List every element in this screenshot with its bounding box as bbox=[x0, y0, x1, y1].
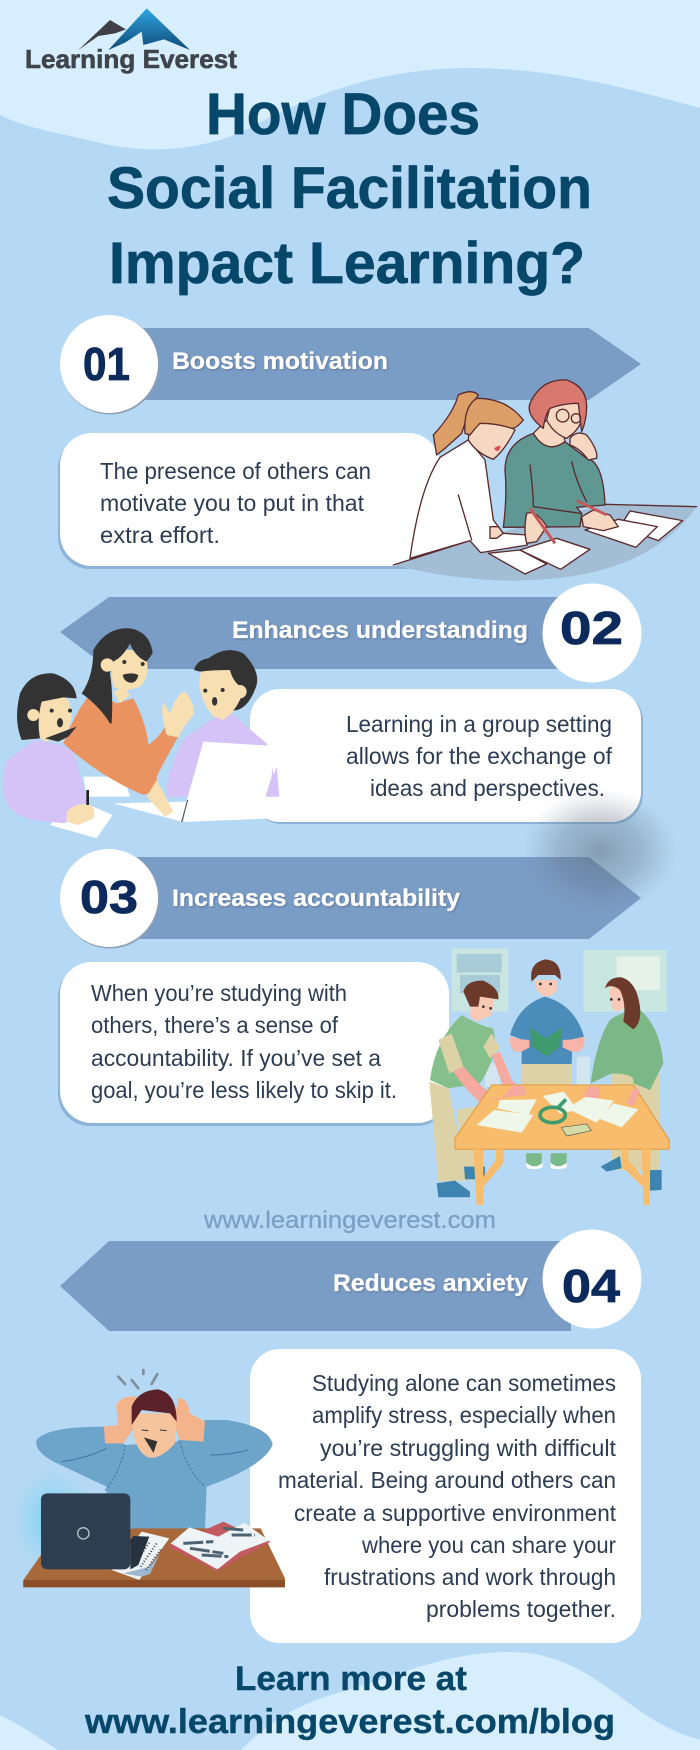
banner 01: Boosts motivation bbox=[172, 348, 388, 375]
circle 02 bbox=[542, 584, 642, 682]
card 03: When you’re studying with bbox=[91, 980, 347, 1006]
title bbox=[107, 82, 592, 296]
card 02 bbox=[250, 689, 643, 824]
footer call to action: Learn more at bbox=[235, 1660, 467, 1698]
card 04: amplify stress, especially when bbox=[312, 1402, 616, 1428]
card 04: frustrations and work through bbox=[324, 1564, 616, 1590]
footer call to action: www.learningeverest.com/blog bbox=[84, 1703, 615, 1741]
card 03: accountability. If you’ve set a bbox=[91, 1045, 381, 1071]
banner 04: Reduces anxiety bbox=[333, 1270, 529, 1297]
banner 03: Increases accountability bbox=[172, 885, 461, 912]
card 02: allows for the exchange of bbox=[346, 743, 613, 769]
blurred smudge bbox=[522, 789, 678, 913]
banner 03 bbox=[130, 857, 641, 939]
card 04: material. Being around others can bbox=[278, 1467, 616, 1493]
illustration: two women studying bbox=[393, 380, 697, 581]
card 04: where you can share your bbox=[361, 1532, 616, 1558]
banner 04 bbox=[60, 1241, 571, 1331]
website url: www.learningeverest.com bbox=[203, 1207, 496, 1234]
footer call to action bbox=[84, 1660, 615, 1741]
card 03: goal, you’re less likely to skip it. bbox=[91, 1077, 397, 1103]
card 01: extra effort. bbox=[100, 522, 220, 548]
card 03: others, there’s a sense of bbox=[91, 1012, 339, 1038]
circle 03 bbox=[60, 849, 160, 948]
bottom wave bbox=[0, 1652, 700, 1750]
card 01 bbox=[58, 433, 440, 569]
circle 04 bbox=[542, 1230, 642, 1328]
card 04 bbox=[250, 1349, 641, 1643]
circle 04: 04 bbox=[562, 1260, 620, 1312]
illustration: three students talking bbox=[3, 628, 279, 838]
card 03 bbox=[58, 962, 449, 1126]
card 01: motivate you to put in that bbox=[100, 490, 365, 516]
title: Impact Learning? bbox=[109, 231, 585, 296]
banner 01 bbox=[130, 328, 641, 400]
card 04: problems together. bbox=[426, 1596, 616, 1622]
illustration: stressed student at desk bbox=[13, 1370, 285, 1587]
circle 01 bbox=[60, 315, 160, 414]
logo: Learning Everest bbox=[25, 44, 237, 74]
banner 02: Enhances understanding bbox=[232, 617, 528, 644]
banner 02 bbox=[60, 597, 570, 669]
illustration: three students at a table bbox=[429, 948, 669, 1205]
circle 03: 03 bbox=[80, 871, 138, 923]
card 04: create a supportive environment bbox=[294, 1500, 617, 1526]
card 04: Studying alone can sometimes bbox=[312, 1370, 616, 1396]
circle 02: 02 bbox=[560, 602, 623, 654]
title: Social Facilitation bbox=[107, 156, 592, 221]
card 02: Learning in a group setting bbox=[346, 711, 612, 737]
card 04: you’re struggling with difficult bbox=[320, 1435, 617, 1461]
card 02: ideas and perspectives. bbox=[370, 775, 605, 801]
card 01: The presence of others can bbox=[100, 458, 371, 484]
logo bbox=[25, 8, 237, 74]
circle 01: 01 bbox=[83, 338, 130, 390]
title: How Does bbox=[206, 82, 480, 147]
top wave bbox=[0, 0, 700, 149]
